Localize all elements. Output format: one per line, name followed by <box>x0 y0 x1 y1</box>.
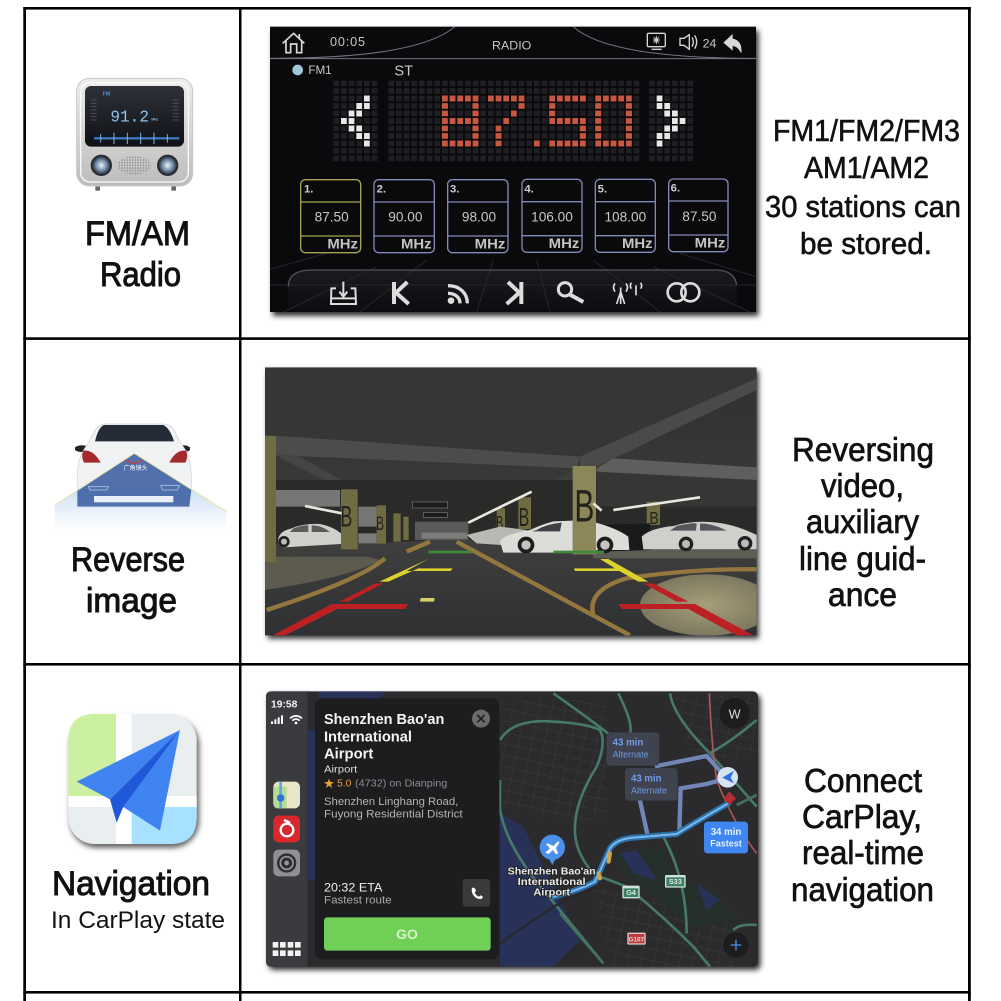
text: reversing description: line guid- <box>799 540 926 577</box>
heading: FM/AM Radio: Radio <box>100 256 181 294</box>
CarPlay sidebar <box>266 691 307 967</box>
road badges: G107 <box>629 936 645 943</box>
preset 5: MHz <box>622 236 653 251</box>
preset 3 <box>448 180 508 253</box>
destination card: (4732) on Dianping <box>355 779 447 790</box>
destination card: 20:32 ETA <box>324 882 383 895</box>
preset 6: 6. <box>671 183 680 195</box>
screen: radio head unit <box>270 27 759 316</box>
destination card: Airport <box>324 747 373 763</box>
toolbar icons <box>331 282 699 304</box>
destination card <box>315 698 499 959</box>
screen: parking garage camera view <box>265 367 773 639</box>
preset 4: MHz <box>549 236 580 251</box>
map base <box>307 691 757 967</box>
heading: Navigation: In CarPlay state <box>51 907 225 934</box>
destination card: Shenzhen Bao'an <box>324 712 444 728</box>
destination card: GO <box>396 926 418 942</box>
route time callouts: 43 min <box>631 773 662 784</box>
routes <box>553 756 728 897</box>
panel: reverse image row <box>55 367 934 639</box>
volume 24: 24 <box>703 36 717 50</box>
roads <box>500 693 757 967</box>
icon: car rear with camera cone <box>55 424 227 530</box>
dot matrix frequency display: 87.50 <box>333 83 695 158</box>
heading: Reverse image: Reverse <box>71 541 185 579</box>
text: radio features: FM1/FM2/FM3 <box>773 113 960 148</box>
destination card: Airport <box>324 765 358 776</box>
preset 1: 1. <box>304 184 313 196</box>
B markers: B <box>519 502 529 532</box>
heading: Navigation: Navigation <box>52 865 210 903</box>
destination card: Fastest route <box>324 895 392 907</box>
destination card: 5.0 <box>337 779 352 790</box>
parked cars <box>278 521 757 553</box>
icon: retro radio <box>77 78 193 191</box>
icon: retro radio: FM <box>103 92 111 98</box>
map buttons <box>719 698 750 958</box>
title: RADIO: RADIO <box>492 38 531 52</box>
heading: Reverse image <box>71 541 185 620</box>
route time callouts <box>607 732 748 853</box>
preset 5: 5. <box>598 183 607 195</box>
heading: Navigation <box>51 865 225 934</box>
status icons <box>647 33 741 53</box>
garage ceiling and beams <box>265 367 757 543</box>
destination pin: International <box>518 877 586 888</box>
text: reversing description: video, <box>821 467 904 504</box>
preset 4: 106.00 <box>531 209 573 224</box>
text: reversing description: Reversing <box>792 431 934 468</box>
route time callouts: Alternate <box>631 785 667 795</box>
B markers: B <box>376 514 384 535</box>
band indicator: ST <box>394 63 413 79</box>
panel: FM/AM radio row <box>77 27 961 316</box>
map buttons: W <box>729 707 741 721</box>
pillars <box>265 436 660 562</box>
time: 00:05 <box>330 35 366 49</box>
route time callouts: Alternate <box>613 750 649 760</box>
preset 1: 87.50 <box>315 210 349 225</box>
preset 6: 87.50 <box>682 209 717 224</box>
preset 1: MHz <box>327 236 358 251</box>
screen: CarPlay map <box>266 691 761 970</box>
icon: retro radio: MHz <box>151 118 159 122</box>
route time callouts: Fastest <box>710 839 742 849</box>
preset 2: MHz <box>401 236 432 251</box>
text: radio features: 30 stations can <box>765 189 961 224</box>
road badges: S33 <box>669 877 682 886</box>
destination pin: Shenzhen Bao'an <box>508 866 596 877</box>
icon: car rear with camera cone: 广角镜头 <box>124 464 148 472</box>
preset 3: 3. <box>450 184 459 196</box>
text: reversing description <box>792 431 934 613</box>
route time callouts: 34 min <box>711 827 741 838</box>
text: radio features <box>765 113 961 261</box>
CarPlay sidebar: 19:58 <box>271 700 298 711</box>
preset 5 <box>595 179 655 252</box>
preset 1 <box>301 180 361 253</box>
icon: retro radio: 91.2 <box>110 108 149 127</box>
text: CarPlay description: CarPlay, <box>802 798 922 835</box>
text: CarPlay description <box>791 762 934 908</box>
B markers <box>342 490 658 530</box>
heading: FM/AM Radio <box>85 215 190 294</box>
preset 2: 2. <box>377 184 386 196</box>
road badges <box>622 875 686 945</box>
B markers: B <box>496 513 503 534</box>
current location marker <box>717 767 738 805</box>
preset 2: 90.00 <box>388 210 423 225</box>
text: CarPlay description: Connect <box>804 762 922 799</box>
text: reversing description: ance <box>828 576 897 613</box>
destination card: Shenzhen Linghang Road, <box>324 796 458 808</box>
destination card: Fuyong Residential District <box>324 809 463 821</box>
preset 6: MHz <box>695 235 726 250</box>
preset 4 <box>522 179 582 252</box>
tan floor lines <box>267 542 757 635</box>
panel: navigation row <box>51 691 934 970</box>
text: radio features: AM1/AM2 <box>804 150 929 185</box>
B markers: B <box>649 508 659 528</box>
preset 3: MHz <box>475 236 506 251</box>
band indicator <box>292 63 413 79</box>
B markers: B <box>340 501 352 534</box>
parking guide lines <box>273 552 753 635</box>
band indicator: FM1 <box>308 64 332 77</box>
preset 4: 4. <box>524 183 534 195</box>
preset 5: 108.00 <box>604 209 647 224</box>
text: CarPlay description: navigation <box>791 871 934 908</box>
icon: navigation paper plane <box>68 714 199 848</box>
barrier arms <box>305 492 700 523</box>
destination card: International <box>324 729 412 745</box>
icon: home <box>283 33 304 53</box>
B markers: B <box>574 481 594 532</box>
preset 2 <box>374 180 434 253</box>
overhead signs <box>412 502 448 517</box>
garage floor <box>265 540 757 635</box>
text: CarPlay description: real-time <box>802 834 924 871</box>
preset 3: 98.00 <box>462 210 496 225</box>
destination pin: Airport <box>533 888 571 899</box>
text: reversing description: auxiliary <box>806 503 919 540</box>
text: radio features: be stored. <box>800 226 932 261</box>
route time callouts: 43 min <box>613 738 643 749</box>
destination pin <box>508 835 596 899</box>
heading: Reverse image: image <box>86 582 177 620</box>
preset 6 <box>669 179 728 252</box>
heading: FM/AM Radio: FM/AM <box>85 215 190 253</box>
road badges: G4 <box>626 888 637 897</box>
